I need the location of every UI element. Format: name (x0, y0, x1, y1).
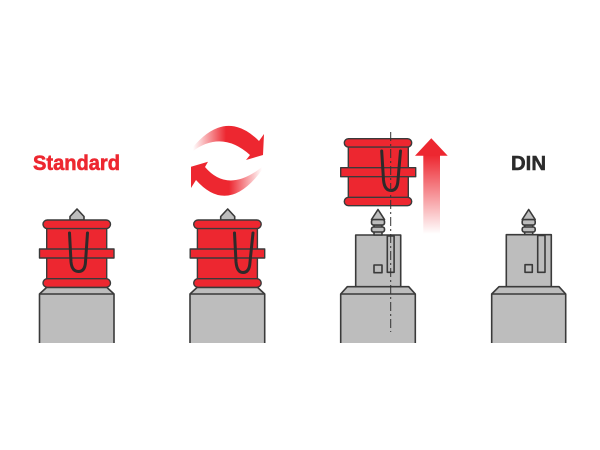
cylinder base (492, 287, 566, 343)
slot (538, 236, 545, 272)
icon: rotate arrows (191, 126, 264, 196)
DIN neck (356, 235, 401, 287)
square port (374, 265, 382, 273)
upper arrow (193, 126, 264, 160)
arrow: lift up (415, 138, 448, 234)
cylinder base (40, 288, 114, 343)
red cap (190, 220, 265, 287)
heading: Standard: Standard (33, 152, 120, 175)
valve: standard with cap rotated (190, 209, 265, 343)
valve: DIN (492, 210, 566, 343)
cylinder base (190, 288, 265, 343)
red cap lifted (341, 139, 416, 206)
axis line (390, 132, 392, 332)
cylinder base (341, 287, 415, 343)
valve tip (221, 209, 235, 220)
valve: cap removed (341, 132, 416, 343)
red cap (40, 220, 114, 287)
valve tip (70, 209, 84, 220)
valve: standard with red cap (40, 209, 114, 343)
square port (525, 265, 532, 272)
threaded tip (522, 210, 535, 235)
threaded tip (372, 210, 384, 235)
lower arrow (191, 162, 262, 196)
DIN neck (506, 235, 551, 287)
heading: DIN: DIN (511, 153, 546, 175)
slot (387, 236, 394, 272)
